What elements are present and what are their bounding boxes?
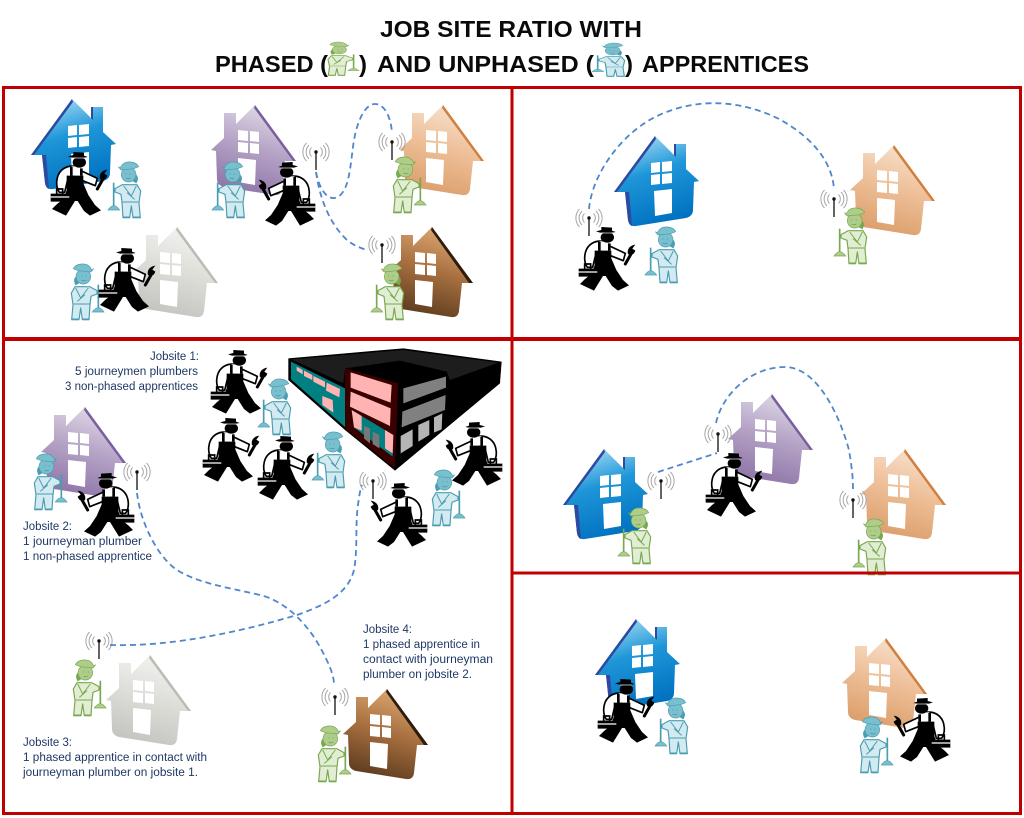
text: jobsite 2: 1 non-phased apprentice bbox=[23, 551, 152, 563]
icon: orange house bbox=[850, 145, 935, 235]
icon: apprentice at jobsite 2 bbox=[34, 454, 67, 510]
text: jobsite 3: Jobsite 3: bbox=[23, 737, 72, 749]
icon: apprentice bbox=[645, 227, 678, 283]
icon: orange house bbox=[861, 449, 946, 539]
icon: apprentice 3 bbox=[432, 470, 465, 526]
icon: journeyman at blue house bbox=[598, 679, 654, 743]
title: AND UNPHASED ( bbox=[377, 51, 594, 77]
title: JOB SITE RATIO WITH bbox=[380, 16, 642, 42]
icon: phased apprentice at jobsite 4 bbox=[318, 726, 351, 782]
icon: blue house bbox=[31, 99, 116, 189]
panel: two houses, bottom right bbox=[512, 573, 1020, 814]
text: jobsite 4: plumber on jobsite 2. bbox=[363, 669, 472, 681]
icon: antenna at blue house bbox=[648, 472, 674, 499]
icon: antenna at purple house bbox=[303, 143, 329, 170]
text: jobsite 4: 1 phased apprentice in bbox=[363, 639, 480, 651]
text: jobsite 3 bbox=[22, 737, 207, 779]
icon: journeyman at jobsite 2 bbox=[78, 473, 134, 537]
panel: jobsites detail, bottom left bbox=[4, 340, 512, 814]
arrow: link to orange house bbox=[316, 104, 392, 198]
icon: unphased apprentice in title bbox=[592, 43, 625, 76]
icon: antenna at purple house bbox=[705, 425, 731, 452]
arrow: blue house to journeyman bbox=[658, 453, 717, 472]
icon: journeyman at orange house bbox=[894, 698, 950, 762]
panel: three houses, middle right bbox=[512, 340, 1020, 575]
icon: phased apprentice at blue house bbox=[618, 508, 651, 564]
icon: antenna right bbox=[821, 190, 847, 217]
icon: purple house bbox=[41, 407, 126, 497]
icon: blue house bbox=[563, 449, 648, 539]
icon: blue house bbox=[614, 136, 699, 226]
icon: grey house bbox=[133, 227, 218, 317]
icon: journeyman 2 bbox=[203, 418, 259, 482]
title: APPRENTICES bbox=[642, 51, 809, 77]
panel: two houses, top right bbox=[512, 88, 1020, 338]
icon: journeyman 3 bbox=[258, 436, 314, 500]
icon: journeyman 4 bbox=[446, 422, 502, 486]
arrow: link between antennas bbox=[589, 103, 834, 209]
icon: journeyman bbox=[579, 227, 635, 291]
text: jobsite 1 bbox=[65, 351, 199, 393]
text: jobsite 2: Jobsite 2: bbox=[23, 521, 72, 533]
icon: apprentice 2 bbox=[312, 432, 345, 488]
icon: antenna jobsite 4 bbox=[322, 688, 348, 715]
icon: purple house bbox=[211, 105, 296, 195]
arrow: link to brown house bbox=[316, 172, 367, 250]
text: jobsite 3: journeyman plumber on jobsite 1. bbox=[22, 767, 198, 779]
icon: apprentice at purple house bbox=[212, 162, 245, 218]
icon: brown house bbox=[343, 689, 428, 779]
icon: phased apprentice at orange house bbox=[393, 157, 426, 213]
icon: apprentice at orange house bbox=[860, 717, 893, 773]
text: jobsite 2 bbox=[23, 521, 152, 563]
icon: phased apprentice in title bbox=[328, 42, 359, 75]
icon: phased apprentice bbox=[834, 208, 867, 264]
icon: antenna jobsite 2 bbox=[124, 463, 150, 490]
icon: brown house bbox=[388, 227, 473, 317]
icon: apprentice at blue house bbox=[655, 698, 688, 754]
icon: journeyman 5 bbox=[371, 483, 427, 547]
text: jobsite 3: 1 phased apprentice in contact with bbox=[23, 752, 207, 764]
icon: journeyman 1 bbox=[211, 350, 267, 414]
icon: journeyman bbox=[706, 453, 762, 517]
icon: orange house bbox=[399, 105, 484, 195]
icon: journeyman at purple house bbox=[259, 162, 315, 226]
panel: four separate houses, top left bbox=[4, 88, 512, 338]
title: PHASED ( bbox=[215, 51, 328, 77]
text: jobsite 1: 5 journeymen plumbers bbox=[75, 366, 198, 378]
icon: grey house bbox=[106, 655, 191, 745]
icon: orange house bbox=[842, 638, 927, 728]
text: jobsite 4: Jobsite 4: bbox=[363, 624, 412, 636]
arrow: jobsite 2 to jobsite 4 bbox=[137, 493, 334, 683]
text: jobsite 4: contact with journeyman bbox=[363, 654, 493, 666]
arrow: journeyman to orange house bbox=[716, 367, 853, 490]
icon: apprentice at blue house bbox=[108, 162, 141, 218]
icon: antenna at orange house bbox=[379, 133, 405, 160]
title: ) bbox=[625, 51, 633, 77]
icon: apprentice at grey house bbox=[71, 264, 104, 320]
icon: antenna jobsite 1 bbox=[360, 472, 386, 499]
text: jobsite 1: 3 non-phased apprentices bbox=[65, 381, 198, 393]
icon: antenna at brown house bbox=[369, 236, 395, 263]
title: ) bbox=[359, 51, 367, 77]
text: jobsite 1: Jobsite 1: bbox=[150, 351, 199, 363]
icon: journeyman at blue house bbox=[51, 152, 107, 216]
text: jobsite 4 bbox=[363, 624, 493, 681]
arrow: jobsite 3 to jobsite 1 bbox=[110, 485, 362, 645]
icon: apprentice 1 bbox=[258, 379, 291, 435]
icon: phased apprentice at orange house bbox=[853, 519, 886, 575]
icon: antenna left bbox=[576, 209, 602, 236]
icon: purple house bbox=[728, 394, 813, 484]
icon: phased apprentice at jobsite 3 bbox=[73, 660, 106, 716]
icon: blue house bbox=[595, 619, 680, 709]
icon: antenna jobsite 3 bbox=[86, 632, 112, 659]
title bbox=[215, 16, 809, 77]
icon: journeyman at grey house bbox=[99, 248, 155, 312]
icon: antenna at orange house bbox=[840, 491, 866, 518]
icon: phased apprentice at brown house bbox=[371, 264, 404, 320]
text: jobsite 2: 1 journeyman plumber bbox=[23, 536, 142, 548]
icon: building bbox=[288, 348, 502, 471]
